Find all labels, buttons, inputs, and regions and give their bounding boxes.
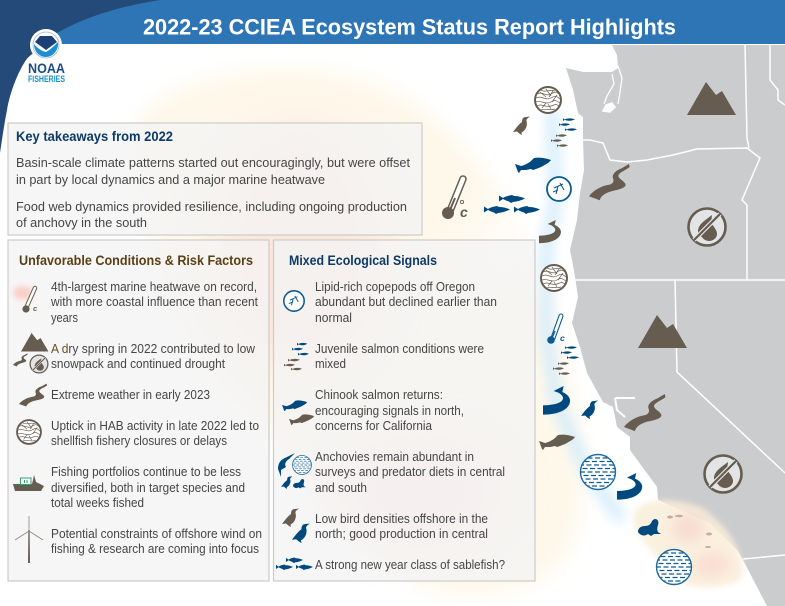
icon: mountain north [687, 82, 736, 115]
icon: anchovy school south [656, 550, 692, 584]
icon: fishing boat [13, 475, 44, 491]
icon: river [19, 384, 47, 407]
icon: juvenile salmon central [553, 346, 579, 375]
icon: thermometer large: c [460, 204, 468, 220]
map icons [442, 82, 742, 584]
icon: large blue arrow [543, 386, 570, 415]
icon: HAB central [541, 265, 567, 291]
icon: thermometer with heat glow [13, 286, 38, 313]
text: fishing portfolios: diversified, both in target species and [51, 481, 245, 495]
NOAA Fisheries logo [28, 29, 65, 85]
text: chinook returns [315, 388, 464, 433]
icon: sablefish [276, 558, 313, 570]
heading: mixed signals: Mixed Ecological Signals [289, 253, 437, 268]
icon: HAB [17, 420, 41, 444]
text: copepods: abundant but declined earlier than [315, 295, 497, 309]
text: copepods [315, 280, 497, 325]
text: HAB activity: Uptick in HAB activity in late 2022 led to [51, 419, 259, 433]
panel: key takeaways [8, 123, 422, 235]
Southern California warm water patch [633, 500, 743, 587]
text: fishing portfolios: Fishing portfolios continue to be less [51, 465, 241, 479]
icon: blue chinook salmon [515, 158, 551, 173]
text: heatwave [50, 280, 258, 325]
text: HAB activity [51, 419, 259, 448]
text: birds: Low bird densities offshore in the [315, 512, 488, 526]
icon: thermometer large [442, 179, 468, 220]
NOAA Fisheries logo: NOAA [28, 60, 65, 76]
NOAA Fisheries logo: FISHERIES [28, 74, 65, 85]
text: birds [315, 512, 488, 541]
text: copepods: Lipid-rich copepods off Oregon [315, 280, 475, 294]
text: anchovies [315, 450, 505, 495]
text: birds: north; good production in central [315, 527, 488, 541]
icon: brown salmon [539, 435, 575, 450]
icon: copepod [284, 291, 304, 311]
text: dry spring: A dry spring in 2022 contributed to low [51, 342, 256, 356]
text: chinook returns: encouraging signals in north, [315, 404, 464, 418]
icon: copepod north [547, 177, 571, 201]
icon: offshore wind turbine [15, 516, 43, 563]
text: offshore wind: fishing & research are coming into focus [51, 542, 259, 556]
icon: anchovy school central [580, 454, 616, 490]
icon: blue arrow central [617, 473, 642, 500]
text: dry spring: snowpack and continued drought [51, 357, 225, 371]
icon: river north [589, 164, 630, 200]
header band [0, 0, 785, 153]
text: climate patterns [16, 156, 410, 187]
icon: juvenile salmon north [551, 118, 577, 147]
text: juvenile salmon: Juvenile salmon conditions were [315, 342, 484, 356]
text: climate patterns: in part by local dynamics and a major marine heatwave [16, 173, 325, 187]
icon: mountain central [638, 315, 687, 348]
text: offshore wind: Potential constraints of offshore wind on [51, 527, 262, 541]
text: food web: Food web dynamics provided resilience, including ongoing production [16, 200, 407, 214]
icon: small curling arrow [539, 220, 561, 243]
text: food web: of anchovy in the south [16, 216, 147, 230]
icon: thermometer blue: c [560, 333, 565, 343]
text: fishing portfolios [51, 465, 245, 510]
panel: mixed ecological signals [274, 240, 535, 581]
text: dry spring [51, 342, 256, 371]
text: anchovies: and south [315, 481, 367, 495]
text: heatwave: years [51, 311, 78, 325]
text: chinook returns: concerns for California [315, 419, 432, 433]
heading: unfavorable conditions: Unfavorable Conditions & Risk Factors [19, 253, 253, 268]
icon: brown seabird north [513, 116, 530, 135]
text: anchovies: Anchovies remain abundant in [315, 450, 474, 464]
icon: mountain, river and no water [13, 333, 48, 373]
title: 2022-23 CCIEA Ecosystem Status Report Highlights [143, 14, 676, 40]
icon: no water central [704, 456, 742, 492]
background colour wash [135, 69, 583, 596]
text: food web [16, 200, 407, 230]
text: fishing portfolios: total weeks fished [51, 496, 144, 510]
icon: river central [624, 394, 665, 431]
icon: sea lion [638, 519, 661, 536]
text: anchovies: surveys and predator diets in central [315, 465, 505, 479]
heading: key takeaways: Key takeaways from 2022 [16, 129, 173, 144]
text: extreme weather: Extreme weather in early 2023 [51, 388, 210, 402]
text: heatwave: 4th-largest marine heatwave on record, [51, 280, 257, 294]
icon: no water north [688, 208, 726, 246]
text: copepods: normal [315, 311, 352, 325]
icon: thermometer blue [547, 316, 565, 344]
text: heatwave: with more coastal influence than recent [50, 295, 258, 309]
text: HAB activity: shellfish fishery closures or delays [51, 434, 227, 448]
panel: unfavorable conditions [8, 240, 269, 581]
icon: anchovy and predators [278, 453, 312, 489]
text: sablefish: A strong new year class of sablefish? [315, 558, 505, 572]
text: offshore wind [51, 527, 262, 556]
icon: birds [282, 508, 310, 543]
text: juvenile salmon [315, 342, 484, 371]
text: climate patterns: Basin-scale climate patterns started out encouragingly, but were offset [16, 156, 410, 170]
text: juvenile salmon: mixed [315, 357, 346, 371]
map: west coast land [566, 45, 785, 606]
icon: blue seabird [581, 400, 598, 419]
icon: juvenile salmon [284, 343, 309, 370]
icon: thermometer with heat glow: c [33, 304, 38, 313]
icon: chinook salmon pair [282, 400, 314, 425]
icon: HAB north [535, 87, 561, 113]
coastal water shading [546, 110, 622, 520]
text: chinook returns: Chinook salmon returns: [315, 388, 443, 402]
icon: sablefish trio [484, 195, 540, 214]
